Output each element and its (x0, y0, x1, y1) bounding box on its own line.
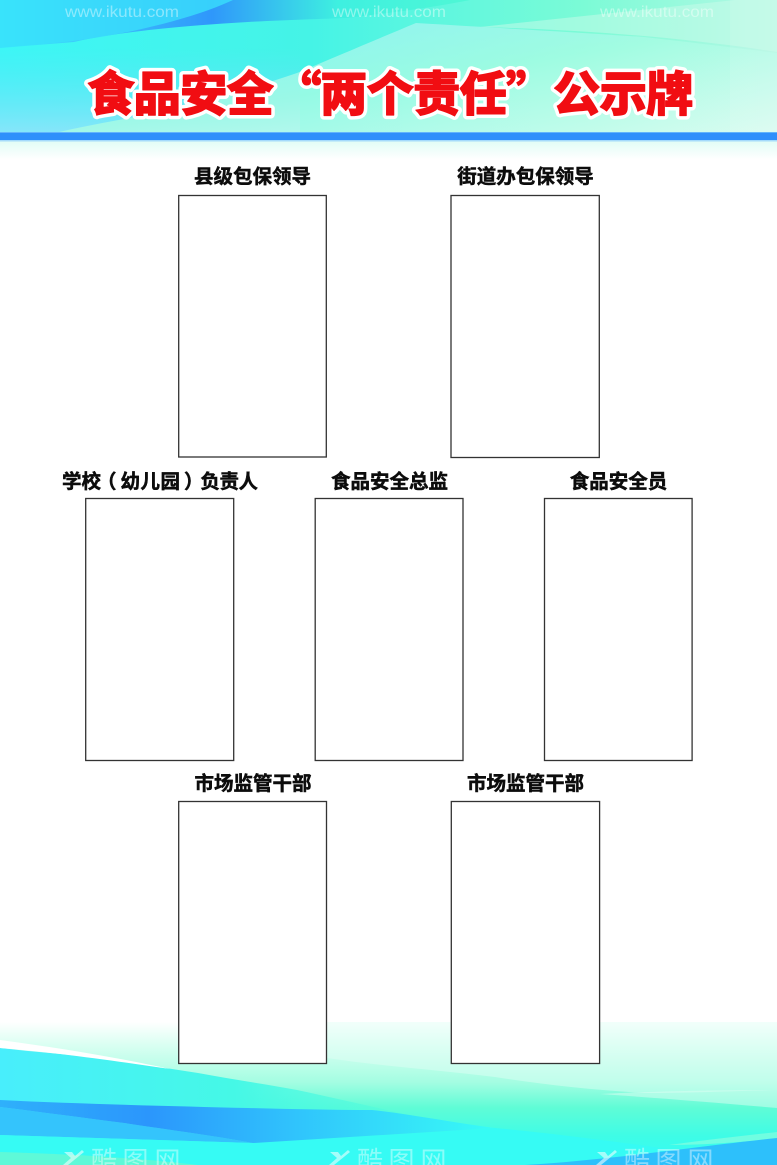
photo frame: food safety officer (544, 498, 692, 760)
header watermark: www.ikutu.com: www.ikutu.com (599, 4, 714, 21)
label: county leader: 县级包保领导 (194, 160, 311, 189)
label: street office leader: 街道办包保领导 (457, 160, 594, 189)
footer watermark: 酷图网 (63, 1146, 714, 1165)
header watermark: www.ikutu.com: www.ikutu.com (64, 4, 179, 21)
photo frame: market supervisor 2 (451, 802, 600, 1064)
label: market supervisor 1: 市场监管干部 (194, 767, 312, 796)
label: food safety officer: 食品安全员 (570, 465, 667, 494)
footer background (0, 1022, 777, 1165)
header blue divider bar (0, 132, 777, 160)
label: school head: 学校（幼儿园）负责人 (62, 465, 258, 494)
header watermark: www.ikutu.com: www.ikutu.com (331, 4, 446, 21)
label: food safety director: 食品安全总监 (331, 465, 448, 494)
photo frame: county leader (179, 196, 326, 457)
photo frame: school head (86, 498, 234, 760)
title: 食品安全“两个责任”公示牌 (87, 56, 694, 125)
header background band (0, 0, 777, 133)
photo frame: food safety director (315, 498, 463, 760)
header watermark: www.ikutu.com (64, 4, 714, 21)
label: market supervisor 2: 市场监管干部 (467, 767, 584, 796)
photo frame: street office leader (451, 196, 599, 458)
title: 食品安全“两个责任”公示牌 (87, 56, 694, 125)
photo frame: market supervisor 1 (179, 802, 326, 1064)
